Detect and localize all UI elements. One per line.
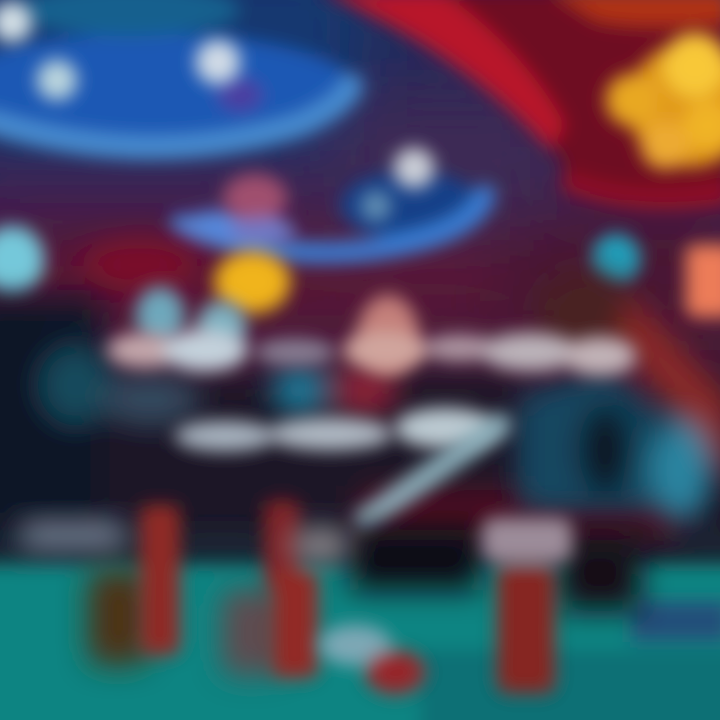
pink figure, centre	[358, 295, 418, 375]
dark table shadow	[350, 530, 640, 610]
yellow orb	[214, 251, 290, 313]
teal figure details	[37, 343, 399, 427]
red pillar, centre	[222, 590, 282, 675]
cyan orb, right	[592, 234, 640, 284]
yellow glow, top right	[606, 33, 720, 169]
stars on disc	[0, 2, 240, 100]
cyan orb, left	[0, 226, 44, 294]
figure above the orb	[223, 174, 296, 246]
diagonal light arm	[365, 425, 500, 520]
orange panel, right	[686, 245, 720, 317]
teal floor	[0, 565, 720, 720]
white and red token on floor	[319, 625, 425, 694]
dark middle band	[0, 300, 700, 540]
character, right	[520, 271, 720, 520]
red pillar, right	[482, 518, 572, 693]
blue disc, centre	[177, 171, 485, 253]
red pillar, left	[88, 570, 148, 665]
red haze, left	[80, 237, 200, 293]
white plates, lower left	[20, 522, 348, 560]
red drape, top right	[320, 0, 720, 210]
stars, centre disc	[361, 148, 434, 221]
upper wall haze	[0, 0, 720, 330]
light blue figure, left	[136, 287, 246, 349]
blurred headline	[107, 329, 636, 375]
blurred subheading	[175, 408, 495, 451]
blue disc, top left	[0, 0, 355, 148]
